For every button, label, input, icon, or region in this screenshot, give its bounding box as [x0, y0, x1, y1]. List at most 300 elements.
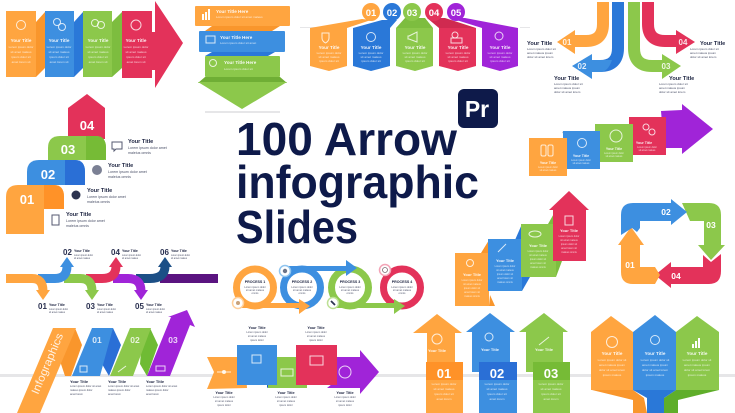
panel: ribbon flag arrow [207, 326, 379, 407]
pentagon blue: ipsum maleus [646, 373, 665, 377]
card 02: ipsum dolor sit [487, 392, 507, 396]
item 01: Your Title [66, 212, 91, 218]
caption 01: Lorem ipsum dolor sit amet [70, 384, 102, 388]
pentagon blue: Lorem ipsum dolor sit [641, 358, 670, 362]
card 01: Lorem ipsum dolor [432, 382, 456, 386]
step 03: 03 [61, 142, 75, 157]
pentagon 01: 01 [366, 8, 377, 19]
pentagon 03: Lorem ipsum dolor [403, 51, 427, 55]
pentagon 05: ipsum dolor sit [490, 59, 510, 63]
ribbon with label: Infographics [30, 331, 66, 396]
circle process 1: PROCESS 1 [245, 280, 265, 284]
pentagon orange: Lorem ipsum dolor sit [598, 358, 626, 362]
label 01: sit amet maleus [49, 311, 66, 314]
ribbon 03 arrow: 03 [168, 335, 178, 345]
caption 01: Your Title [70, 379, 89, 384]
icon: Premiere Pro badge: Pr [465, 96, 489, 122]
column 2: amet lorem sit [497, 277, 513, 280]
banner 2 [199, 31, 285, 52]
caption 02 [108, 379, 140, 396]
column 3: maleus omnis [530, 266, 546, 269]
column 3: sit amet maleus [87, 50, 109, 54]
timeline 04 [86, 257, 123, 278]
ribbon 02 [110, 328, 151, 376]
ribbon 01: 01 [92, 335, 102, 345]
card 02 [479, 362, 517, 413]
item 02: Your Title [87, 188, 112, 194]
column 1: Lorem ipsum dolor [9, 45, 33, 49]
timeline 01 [6, 278, 50, 300]
column 4 arrow: amet lorem sit [561, 247, 577, 250]
caption 03: Your Title [146, 379, 165, 384]
label 02: Your Title [554, 76, 579, 82]
label 05 [135, 302, 165, 314]
step 02 [27, 160, 85, 185]
up arrow 02 [466, 313, 515, 372]
square 4: Your Title [636, 141, 652, 145]
column 3: ipsum dolor sit [88, 55, 108, 59]
pentagon 03: Your Title [405, 45, 426, 50]
label 01 [527, 41, 556, 59]
label 01: Lorem ipsum dolor sit [527, 47, 556, 51]
item 04: maleius omnis [128, 151, 151, 155]
pentagon 02: sit amet maleus [360, 55, 382, 59]
item 01: Lorem ipsum dolor amet [66, 219, 105, 223]
down arrow [198, 82, 287, 109]
column 4 arrow [549, 191, 589, 261]
icon node 4 [380, 264, 390, 276]
label 04 [690, 41, 725, 59]
arrow 03 [634, 2, 681, 79]
column 2: maleus omnis [497, 281, 513, 284]
ribbon with label [17, 328, 76, 413]
caption top 2: ipsum dolor [309, 338, 323, 342]
banner 1 [195, 6, 290, 26]
caption bottom 2: Lorem ipsum dolor [275, 395, 297, 399]
caption bottom 3: ipsum dolor [338, 403, 352, 407]
card 03: Lorem ipsum dolor [539, 382, 563, 386]
item 01: maleius omnis [66, 224, 89, 228]
title: infographic [236, 156, 479, 208]
pentagon orange: amet maleus ipsum [599, 363, 626, 367]
pentagon green: Lorem ipsum dolor sit [683, 358, 712, 362]
pentagon 05: sit amet maleus [489, 55, 511, 59]
column 3: amet lorem sit [530, 262, 546, 265]
step 03 [48, 136, 106, 160]
caption top 2 [305, 326, 327, 342]
circle process 3 [332, 269, 368, 306]
column 3 [521, 224, 556, 277]
column 2: sit amet maleus [496, 269, 514, 272]
pentagon 04: 04 [429, 8, 440, 19]
column 4 arrow: sit amet maleus [560, 239, 578, 242]
pentagon 04: sit amet maleus [447, 55, 469, 59]
title [236, 113, 479, 253]
up arrow 02: Your Title [481, 347, 500, 352]
pentagon 02: Lorem ipsum dolor [359, 51, 383, 55]
pentagon orange: Your Title [602, 351, 623, 356]
label 04 [111, 248, 141, 260]
pentagon 01: ipsum dolor sit [319, 59, 339, 63]
pentagon 02: 02 [387, 8, 397, 19]
column 4: Your Title [126, 38, 147, 43]
circle process 2 [284, 269, 320, 306]
column 4 [122, 11, 152, 78]
pentagon 04: Your Title [448, 45, 469, 50]
caption bottom 1: Lorem ipsum dolor [213, 395, 235, 399]
arrow orange [238, 299, 310, 314]
column 2 [488, 239, 522, 291]
pentagon green: dolor sit amet lorem [684, 368, 711, 372]
column 3: Your Title [88, 38, 109, 43]
step 02: 02 [41, 167, 55, 182]
label 02: Lorem ipsum dolor sit [554, 82, 583, 86]
caption bottom 3: Lorem ipsum dolor [334, 395, 356, 399]
circle process 3: omnis [347, 291, 354, 295]
icon node 1 [232, 298, 244, 308]
cycle arrow 04: 04 [671, 271, 681, 281]
caption 03 [146, 379, 178, 396]
panel: rising squares arrow [529, 104, 713, 176]
label 04: Your Title [122, 249, 138, 253]
pentagon 05: 05 [451, 8, 462, 19]
label 04: sit amet maleus [122, 257, 139, 260]
item 02: Lorem ipsum dolor amet [87, 195, 126, 199]
column 1: Your Title [463, 272, 482, 277]
item 04: Lorem ipsum dolor amet [128, 146, 167, 150]
label 03: 03 [86, 302, 95, 311]
ribbon 03 arrow [147, 310, 195, 376]
pentagon 03: sit amet maleus [404, 55, 426, 59]
caption 03: Lorem ipsum dolor sit amet [146, 384, 178, 388]
item 03: maleius omnis [108, 175, 131, 179]
tail shade blue [267, 378, 277, 388]
square 4 [629, 117, 666, 155]
banner 3: Lorem ipsum dolor sit [224, 67, 253, 71]
column 2: amet lorem sit [50, 60, 69, 64]
caption bottom 3: sit amet maleus [336, 399, 355, 403]
caption bottom 1: Your Title [215, 391, 233, 395]
square 2: Lorem ipsum dolor [571, 159, 591, 162]
pentagon green: Your Title [687, 351, 708, 356]
card 03: ipsum dolor sit [541, 392, 561, 396]
circle process 4: Lorem ipsum dolor [391, 285, 413, 289]
pentagon 02 [353, 3, 401, 71]
timeline 02 [38, 257, 74, 278]
square 1: sit amet maleus [540, 169, 557, 172]
card 01: sit amet maleus [433, 387, 455, 391]
caption top 1 [246, 326, 268, 342]
up arrow 03: Your Title [535, 347, 554, 352]
label 01: dolor sit amet lorem [527, 55, 554, 59]
label 04: dolor sit amet lorem [690, 55, 717, 59]
column 3: amet lorem sit [89, 60, 108, 64]
pentagon orange: ipsum maleus [603, 373, 622, 377]
pentagon 05 [447, 3, 518, 71]
pentagon blue [633, 315, 676, 390]
caption bottom 2 [275, 391, 297, 407]
pentagon green: ipsum maleus [688, 373, 707, 377]
circle process 2: PROCESS 2 [292, 280, 312, 284]
label 05: Your Title [146, 303, 162, 307]
caption 02: Your Title [108, 379, 127, 384]
column 4 arrow: Lorem ipsum dolor [559, 235, 580, 238]
flag start [207, 357, 247, 389]
panel: three up arrows with numbered cards [413, 313, 570, 413]
caption top 1: Your Title [248, 326, 266, 330]
pentagon blue: amet maleus ipsum [642, 363, 669, 367]
caption top 1: sit amet maleus [248, 334, 267, 338]
card 01: ipsum dolor sit [434, 392, 454, 396]
column 2: Lorem ipsum dolor [495, 265, 516, 268]
pentagon 05: Lorem ipsum dolor [488, 51, 512, 55]
circle process 4: sit amet maleus [393, 288, 412, 292]
label 06: Your Title [171, 249, 187, 253]
column 2: sit amet maleus [48, 50, 70, 54]
label 03: amet maleus ipsum [659, 86, 686, 90]
label 02: 02 [63, 248, 72, 257]
label 02: Your Title [74, 249, 90, 253]
pentagon blue: dolor sit amet lorem [642, 368, 669, 372]
label 03: sit amet maleus [97, 311, 114, 314]
arrow 02: 02 [578, 62, 587, 71]
label 04: Lorem ipsum dolor sit [690, 47, 719, 51]
panel: staircase arrow [6, 94, 167, 234]
column 1: maleus omnis [464, 295, 480, 298]
column 3: Lorem ipsum dolor [528, 250, 549, 253]
label 05: sit amet maleus [146, 311, 163, 314]
caption 01: amet lorem [70, 392, 83, 396]
item 04: Your Title [128, 139, 153, 145]
label 06: 06 [160, 248, 169, 257]
red square [296, 345, 337, 385]
card 02: amet lorem [489, 397, 505, 401]
item 03: Your Title [108, 163, 133, 169]
pentagon 01: sit amet maleus [318, 55, 340, 59]
label 01: 01 [38, 302, 47, 311]
column 4: ipsum dolor sit [126, 55, 146, 59]
column 4 arrow: ipsum dolor sit [561, 243, 577, 246]
caption 02: maleus ipsum dolor [108, 388, 131, 392]
square 4: Lorem ipsum dolor [637, 146, 657, 149]
circle process 1: Lorem ipsum dolor [244, 285, 266, 289]
panel: four column arrow [6, 1, 183, 88]
arrow green [334, 299, 405, 314]
label 01 [38, 302, 68, 314]
banner 3: Your Title Here [224, 60, 257, 65]
caption bottom 1: ipsum dolor [217, 403, 231, 407]
banner 1: Your Title Here [216, 9, 249, 14]
up arrow 01: Your Title [428, 348, 447, 353]
column 3 [83, 11, 112, 77]
label 02: sit amet maleus [74, 257, 91, 260]
panel: stacked banner down arrow [195, 6, 290, 109]
column 3: Lorem ipsum dolor [86, 45, 110, 49]
caption 03: amet lorem [146, 392, 159, 396]
pentagon 03: ipsum dolor sit [405, 59, 425, 63]
label 01: Lorem ipsum dolor [49, 308, 68, 311]
timeline 06 [136, 257, 172, 278]
column 2: Your Title [49, 38, 70, 43]
pentagon 01: Your Title [319, 45, 340, 50]
label 03 [86, 302, 116, 314]
column 2: ipsum dolor sit [497, 273, 513, 276]
pentagon 03: 03 [407, 8, 417, 19]
card 01 [426, 362, 463, 413]
column 2: Your Title [496, 258, 515, 263]
cycle arrow 02: 02 [661, 207, 671, 217]
label 05: 05 [135, 302, 144, 311]
step 04: 04 [80, 118, 95, 133]
circle process 3: sit amet maleus [341, 288, 360, 292]
panel: cycle of four arrows [618, 199, 725, 288]
step 01: 01 [20, 192, 34, 207]
arrow 01 [557, 2, 603, 54]
column 3: ipsum dolor sit [530, 258, 546, 261]
square 1: Lorem ipsum dolor [538, 166, 558, 169]
pentagon orange [591, 316, 633, 390]
label 03: Your Title [669, 76, 694, 82]
label 04: Lorem ipsum dolor [122, 254, 141, 257]
circle process 1 [236, 269, 274, 306]
label 04: amet maleus ipsum [690, 51, 717, 55]
pentagon green: amet maleus ipsum [684, 363, 711, 367]
label 06: sit amet maleus [171, 257, 188, 260]
square 3: sit amet maleus [606, 155, 623, 158]
caption top 2: Lorem ipsum dolor [305, 330, 327, 334]
timeline 03 [64, 278, 99, 300]
card 01: amet lorem [436, 397, 452, 401]
caption 02: Lorem ipsum dolor sit amet [108, 384, 140, 388]
column 3: Your Title [529, 243, 548, 248]
column 4: amet lorem sit [127, 60, 146, 64]
pentagon 04 [425, 3, 476, 71]
card 02: sit amet maleus [486, 387, 508, 391]
square 4: sit amet maleus [639, 149, 656, 152]
caption 01 [70, 379, 102, 396]
arrow 02 [572, 2, 618, 79]
panel: four curved arrows [527, 2, 725, 94]
card 03 [533, 362, 570, 413]
caption bottom 1 [213, 391, 235, 407]
column 1 [455, 253, 489, 306]
cycle arrow 01: 01 [625, 260, 635, 270]
banner 3 [205, 56, 280, 77]
label 06 [160, 248, 190, 260]
arrow head [661, 104, 713, 154]
label 03 [659, 76, 694, 94]
caption bottom 2: ipsum dolor [279, 403, 293, 407]
circle process 4: omnis [399, 291, 406, 295]
caption top 2: Your Title [307, 326, 325, 330]
arrow 04: 04 [679, 38, 688, 47]
blue square [237, 345, 277, 385]
caption 02: amet lorem [108, 392, 121, 396]
item 03: Lorem ipsum dolor amet [108, 170, 147, 174]
column 4: Lorem ipsum dolor [124, 45, 148, 49]
title: 100 Arrow [236, 113, 457, 165]
banner 2: Lorem ipsum dolor sit amet [220, 41, 256, 45]
cycle arrow 03: 03 [706, 220, 716, 230]
arrow 04 [648, 2, 695, 54]
pentagon 04: Lorem ipsum dolor [446, 51, 470, 55]
caption bottom 3 [334, 391, 356, 407]
label 03: dolor sit amet lorem [659, 90, 686, 94]
label 05: Lorem ipsum dolor [146, 308, 165, 311]
label 01: Your Title [49, 303, 65, 307]
title: Slides [236, 201, 358, 253]
item 01 [52, 212, 105, 228]
caption top 1: ipsum dolor [250, 338, 264, 342]
square 2 [563, 131, 600, 169]
arrow 01: 01 [563, 38, 572, 47]
square 3: Your Title [606, 147, 622, 151]
caption bottom 2: sit amet maleus [277, 399, 296, 403]
column 1: Your Title [11, 38, 32, 43]
pentagon 02: Your Title [361, 45, 382, 50]
banner 1: Lorem ipsum dolor sit amet maleus [216, 15, 263, 19]
circle process 1: sit amet maleus [246, 288, 265, 292]
icon node 3 [328, 298, 338, 308]
ribbon 02: 02 [130, 335, 140, 345]
label 02: Lorem ipsum dolor [74, 254, 93, 257]
icon node 2 [280, 266, 290, 276]
label 02 [63, 248, 93, 260]
label 01: Your Title [527, 41, 552, 47]
column 2 [45, 11, 74, 77]
column 2: ipsum dolor sit [49, 55, 69, 59]
card 01: 01 [437, 366, 451, 381]
item 04 [112, 139, 167, 155]
item 03 [92, 163, 147, 179]
pentagon blue: Your Title [645, 351, 666, 356]
label 06: Lorem ipsum dolor [171, 254, 190, 257]
label 04: Your Title [700, 41, 725, 47]
step 04 [68, 94, 105, 139]
item 02 [72, 188, 126, 204]
label 02 [554, 76, 583, 94]
timeline 05 [113, 278, 148, 300]
icon: Premiere Pro badge [458, 89, 498, 128]
up arrow 01 [413, 314, 462, 372]
caption bottom 2: Your Title [277, 391, 295, 395]
pentagon green [676, 316, 719, 390]
square 2: sit amet maleus [573, 162, 590, 165]
column 4 arrow: Your Title [560, 228, 579, 233]
card 03: amet lorem [543, 397, 559, 401]
pentagon orange: dolor sit amet lorem [599, 368, 626, 372]
item 02: maleius omnis [87, 200, 110, 204]
column 1: sit amet maleus [463, 283, 481, 286]
caption top 2: sit amet maleus [307, 334, 326, 338]
label 02: amet maleus ipsum [554, 86, 581, 90]
panel: three merging pentagons [591, 315, 719, 413]
column 1: Lorem ipsum dolor [462, 279, 483, 282]
panel: zigzag infographics arrow [17, 310, 195, 413]
column 1: amet lorem sit [464, 291, 480, 294]
panel: timeline arrows [6, 248, 218, 314]
panel: linked process circles [232, 260, 420, 314]
column 2: Lorem ipsum dolor [47, 45, 71, 49]
circle process 4 [384, 269, 420, 306]
circle process 3: Lorem ipsum dolor [339, 285, 361, 289]
step 01 [6, 185, 64, 234]
pentagon 04: ipsum dolor sit [448, 59, 468, 63]
column 4: sit amet maleus [125, 50, 147, 54]
up arrow 03 [519, 313, 568, 372]
square 3: Lorem ipsum dolor [604, 152, 624, 155]
panel: five numbered pentagons [310, 3, 518, 71]
